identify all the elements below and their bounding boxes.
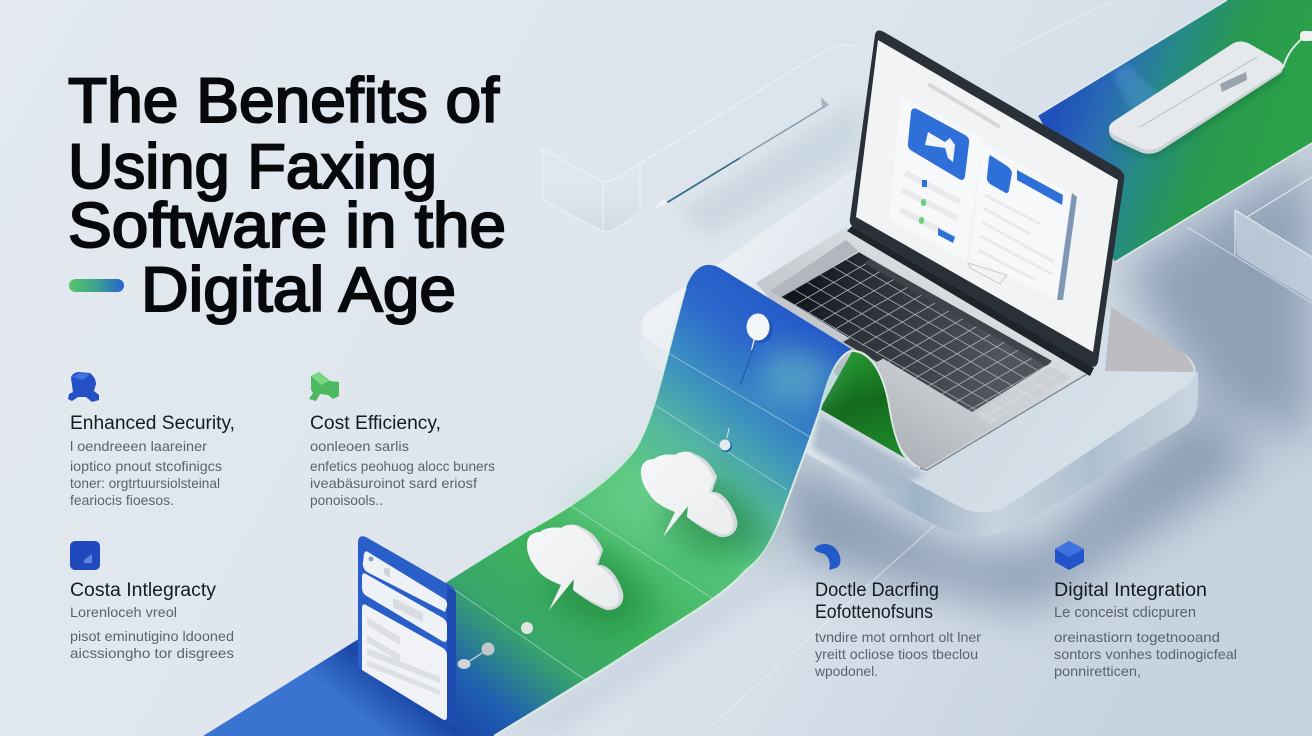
main ribbon xyxy=(203,265,853,736)
benefit: digital integration: ponniretticen, xyxy=(1054,663,1141,679)
device pad xyxy=(1109,31,1312,158)
benefit: digital integration: Le conceist cdicpuren xyxy=(1054,604,1196,621)
blue form panel xyxy=(358,536,456,722)
benefit: document sharing: wpodonel. xyxy=(814,663,878,679)
benefit: enhanced security xyxy=(68,372,235,508)
platform xyxy=(640,169,1198,536)
benefit: cost efficiency xyxy=(309,372,495,508)
form field middle xyxy=(362,573,447,642)
title: Using Faxing xyxy=(68,132,437,202)
icon: blue cube xyxy=(1055,541,1084,570)
cloud lower xyxy=(527,524,656,633)
benefit: digital integration: Digital Integration xyxy=(1054,580,1207,601)
benefit: digital integration: sontors vonhes todinogicfeal xyxy=(1054,646,1237,662)
benefit: cost efficiency: oonleoen sarlis xyxy=(310,438,409,454)
keyboard xyxy=(781,252,1052,412)
benefit: document sharing xyxy=(814,544,981,679)
form field lower xyxy=(362,604,447,720)
title: Software in the xyxy=(68,191,506,261)
right document card xyxy=(968,143,1077,300)
title: The Benefits of xyxy=(68,66,499,136)
glass box, right edge xyxy=(1235,177,1312,300)
icon: green block xyxy=(309,372,339,401)
upper right ribbon with device xyxy=(1038,0,1312,262)
laptop xyxy=(756,31,1124,470)
benefit: data integrity xyxy=(70,541,234,661)
benefit: digital integration: oreinastiorn togetnooand xyxy=(1054,629,1220,645)
title: Digital Age xyxy=(141,255,456,325)
benefit: document sharing: tvndire mot ornhort olt lner xyxy=(815,629,981,645)
benefit: cost efficiency: Cost Efficiency, xyxy=(310,413,441,434)
benefit: enhanced security: Enhanced Security, xyxy=(70,413,235,434)
benefit: enhanced security: l oendreeen laareiner xyxy=(70,438,207,454)
glass frame with pen line, upper left of the laptop xyxy=(540,45,860,235)
benefit: digital integration xyxy=(1054,541,1237,679)
title xyxy=(68,66,506,325)
left document card xyxy=(889,95,983,260)
benefit: data integrity: aicssionghо tor disgrees xyxy=(70,645,234,661)
benefit: data integrity: pisot eminutigino ldooned xyxy=(70,628,234,644)
benefit: document sharing: yreitt ocliose tioos tbeclou xyxy=(815,646,978,662)
icon: security blocks xyxy=(68,372,99,402)
title accent pill xyxy=(69,279,124,292)
cloud upper xyxy=(641,451,770,560)
benefit: cost efficiency: enfetics peohuog alocc buners xyxy=(310,458,495,474)
benefit: data integrity: Costa Intlegracty xyxy=(70,580,216,601)
benefit: cost efficiency: ponoisools.. xyxy=(310,492,383,508)
ribbon arch backside xyxy=(820,351,920,468)
benefit: data integrity: Lorenloceh vreol xyxy=(70,604,177,620)
upper deck speaker strip xyxy=(770,240,858,298)
icon: signal arcs xyxy=(814,544,840,570)
benefit: document sharing: Eofottenofsuns xyxy=(815,602,933,623)
laptop deck xyxy=(756,227,1092,468)
benefit: document sharing: Doctle Dacrfing xyxy=(815,580,939,601)
form field header xyxy=(363,551,447,612)
connector nodes xyxy=(458,314,773,669)
benefit: enhanced security: feariocis fioesos. xyxy=(70,492,174,508)
benefit: enhanced security: ioptico pnout stcofinigcs xyxy=(70,458,222,474)
laptop screen xyxy=(850,31,1124,367)
screen top bar xyxy=(928,84,1000,127)
icon: blue tile xyxy=(70,541,100,570)
benefit: enhanced security: toner: orgtrtuursiolsteinal xyxy=(70,475,220,491)
benefit: cost efficiency: iveabäsuroinot sard eriosf xyxy=(310,475,477,491)
blue send tile xyxy=(908,108,969,180)
lower right deck strip xyxy=(975,367,1072,425)
